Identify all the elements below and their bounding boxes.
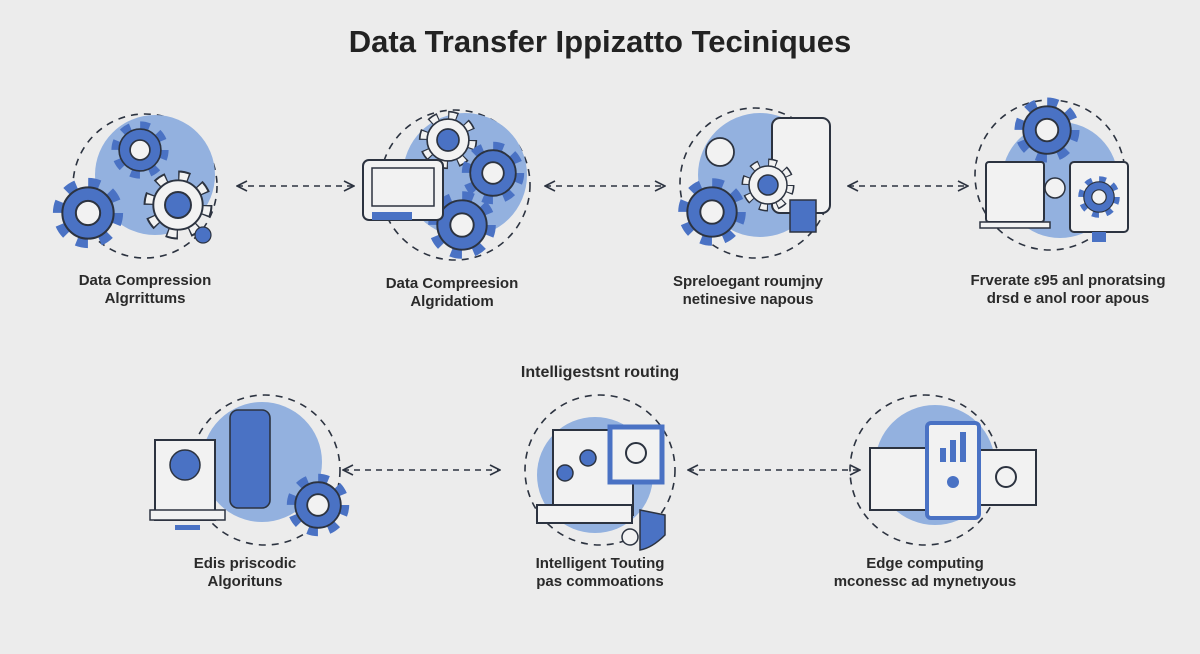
arrow 4 <box>343 469 500 471</box>
label: edis priscodic: Edis priscodic <box>194 555 296 572</box>
icon: edge devices <box>850 395 1036 545</box>
icon: database monitor <box>150 395 343 545</box>
label: data compreesion: Algridatiom <box>410 293 494 310</box>
heading: intelligent routing: Intelligestsnt routing <box>521 364 679 381</box>
label: edis priscodic: Algorituns <box>208 573 282 590</box>
arrow 1 <box>237 185 354 187</box>
label: data compreesion: Data Compreesion <box>386 275 518 292</box>
icon: storage gears <box>680 108 830 258</box>
arrow 2 <box>545 185 665 187</box>
arrow 3 <box>848 185 968 187</box>
icon: compression device <box>363 110 530 260</box>
label: spreloegant: netinesive napous <box>683 291 813 308</box>
label: spreloegant: Spreloegant roumjny <box>673 273 823 290</box>
label: edge computing: mconessc ad mynetıyous <box>834 573 1016 590</box>
icon: routing devices <box>525 395 675 550</box>
arrow 5 <box>688 469 860 471</box>
label: data compression algrrittums: Data Compression <box>79 272 211 289</box>
label: frverate: Frverate ɛ95 anl pnoratsing <box>970 272 1166 289</box>
title: Data Transfer Ippizatto Teciniques <box>349 24 851 59</box>
icon: laptop and monitor <box>975 100 1128 250</box>
label: edge computing: Edge computing <box>866 555 984 572</box>
icon: compression gears <box>60 114 217 258</box>
label: frverate: drsd e anol roor apous <box>987 290 1149 307</box>
label: data compression algrrittums: Algrrittums <box>105 290 185 307</box>
label: intelligent touting: Intelligent Touting <box>536 555 664 572</box>
label: intelligent touting: pas commoations <box>536 573 664 590</box>
